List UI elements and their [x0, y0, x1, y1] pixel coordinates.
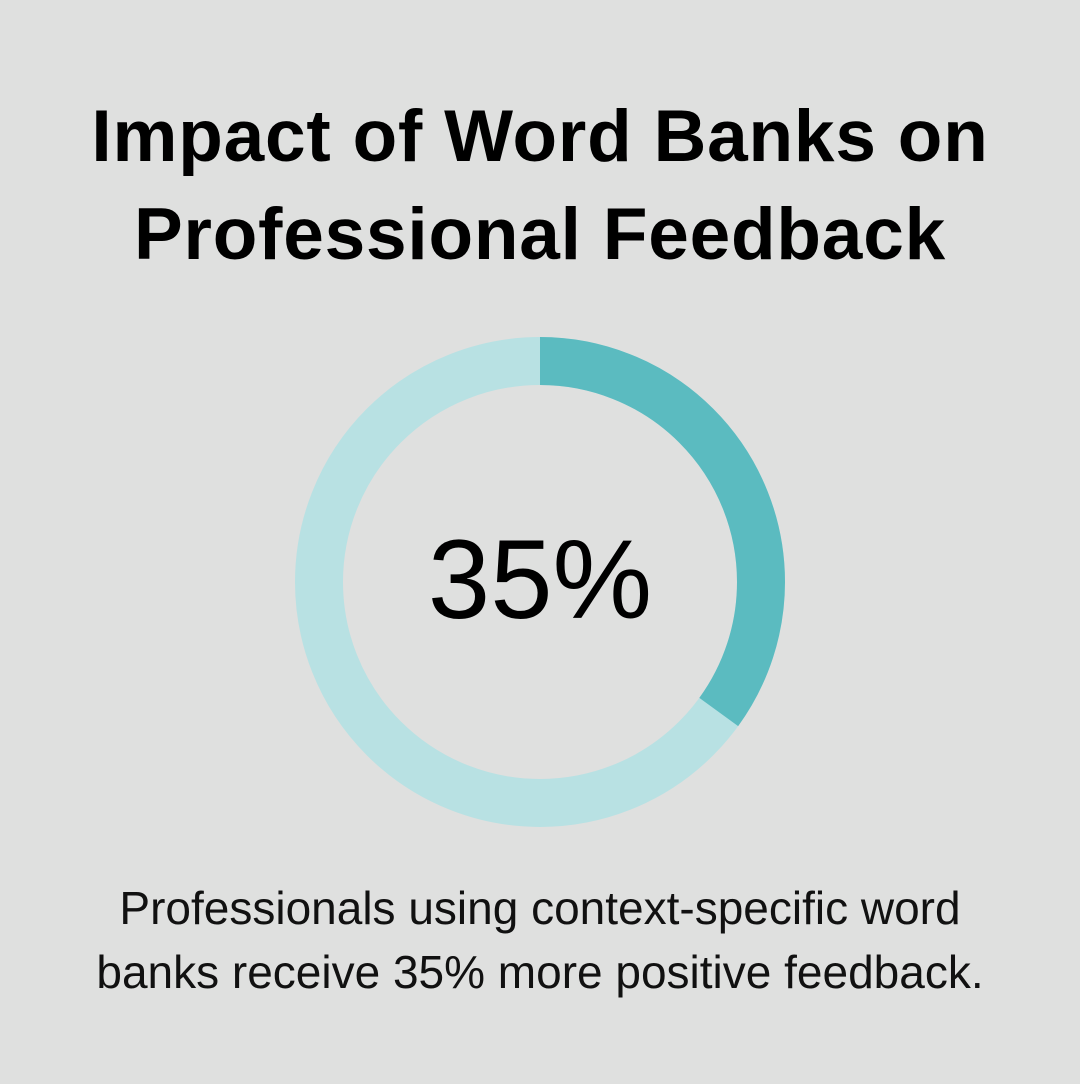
title [91, 96, 989, 275]
title: Impact of Word Banks on [91, 96, 989, 177]
caption [96, 882, 984, 998]
caption: Professionals using context-specific word [119, 882, 961, 934]
percentage value: 35% [428, 517, 652, 642]
title: Professional Feedback [134, 194, 946, 275]
caption: banks receive 35% more positive feedback. [96, 946, 984, 998]
